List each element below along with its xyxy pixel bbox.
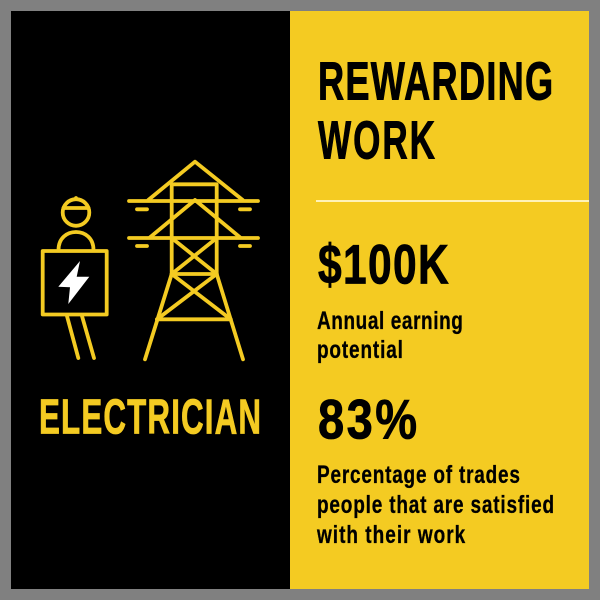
text: satisfaction description: people that are satisfied xyxy=(317,490,554,519)
stat: earnings value: $100K xyxy=(318,233,449,296)
panel: black left xyxy=(11,11,290,589)
icon: electrician xyxy=(43,198,107,358)
panel: yellow right xyxy=(290,11,589,589)
icon: transmission tower xyxy=(129,162,258,359)
stat: satisfaction value: 83% xyxy=(318,388,417,451)
heading xyxy=(318,50,553,170)
label: electrician: ELECTRICIAN xyxy=(39,390,261,444)
text: satisfaction description: Percentage of trades xyxy=(317,460,520,489)
text: satisfaction description xyxy=(316,460,554,549)
heading: WORK xyxy=(318,110,435,170)
heading: REWARDING xyxy=(318,50,553,111)
text: earnings description: potential xyxy=(317,335,403,364)
text: earnings description xyxy=(317,306,463,364)
text: earnings description: Annual earning xyxy=(317,306,463,335)
text: satisfaction description: with their work xyxy=(316,520,466,549)
